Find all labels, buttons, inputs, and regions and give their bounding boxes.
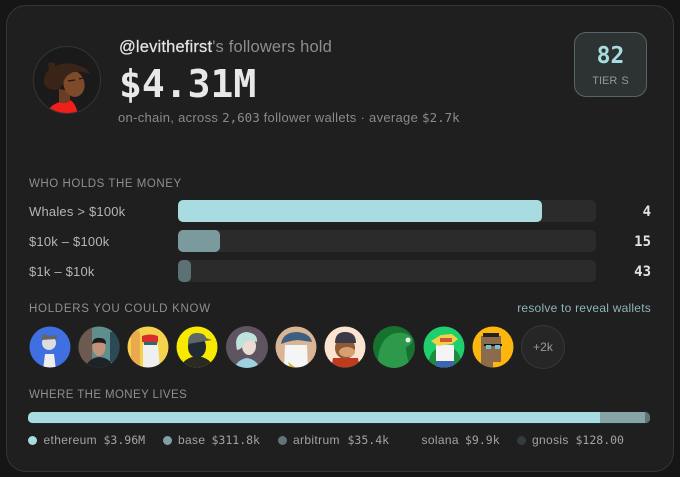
avatar: bright green with flowers <box>424 326 464 368</box>
legend: ethereum: $3.96M <box>104 433 145 447</box>
holder avatars <box>30 325 565 369</box>
avatar: profile illustration <box>33 46 101 114</box>
avatar: penguin <box>276 326 316 368</box>
score badge: TIER S <box>592 74 629 86</box>
legend: gnosis <box>517 433 624 447</box>
section heading: who holds the money: WHO HOLDS THE MONEY <box>29 178 182 190</box>
legend: solana <box>422 433 500 447</box>
legend: arbitrum: $35.4k <box>348 433 389 447</box>
chain stacked bar <box>28 412 650 424</box>
more holders chip: +2k <box>533 340 554 354</box>
avatar: ape with beanie <box>324 326 366 368</box>
legend: base <box>163 433 260 447</box>
avatar: photo of man <box>78 326 120 368</box>
row: 10k to 100k: 15 <box>634 234 651 250</box>
row: 1k to 10k: 43 <box>634 264 651 280</box>
legend: base: $311.8k <box>212 433 260 447</box>
subtitle: on-chain, across 2,603 follower wallets · average $2.7k <box>118 110 460 125</box>
row: whales <box>29 200 651 222</box>
legend: ethereum: ethereum <box>44 433 97 447</box>
row: 1k to 10k <box>29 260 651 282</box>
handle heading: @levithefirst's followers hold <box>119 38 332 56</box>
row: 10k to 100k <box>29 230 651 252</box>
legend: arbitrum <box>278 433 389 447</box>
section heading: holders you could know: HOLDERS YOU COULD KNOW <box>29 303 211 315</box>
legend: gnosis: gnosis <box>532 433 569 447</box>
avatar: blue cartoon <box>30 326 70 368</box>
row: whales: 4 <box>643 204 651 220</box>
more holders chip <box>522 326 564 368</box>
legend: base: base <box>178 433 205 447</box>
row: 1k to 10k: $1k – $10k <box>29 264 95 279</box>
legend: solana: solana <box>422 433 459 447</box>
row: 10k to 100k: $10k – $100k <box>29 234 109 249</box>
link: resolve to reveal wallets: resolve to reveal wallets <box>517 301 651 315</box>
total value: $4.31M <box>119 62 256 106</box>
section heading: where the money lives: WHERE THE MONEY LIVES <box>29 389 187 401</box>
avatar: anime grey <box>226 326 268 368</box>
avatar: pixel punk <box>472 326 514 368</box>
legend: gnosis: $128.00 <box>576 433 624 447</box>
avatar: yellow with red cap <box>128 326 168 368</box>
score badge: 82 <box>597 43 624 69</box>
score badge <box>574 32 647 97</box>
legend: ethereum <box>28 433 145 447</box>
avatar: yellow with helmet <box>176 326 218 368</box>
avatar: green dinosaur <box>373 326 415 368</box>
legend: arbitrum: arbitrum <box>293 433 340 447</box>
legend: solana: $9.9k <box>465 433 500 447</box>
row: whales: Whales > $100k <box>29 204 125 219</box>
